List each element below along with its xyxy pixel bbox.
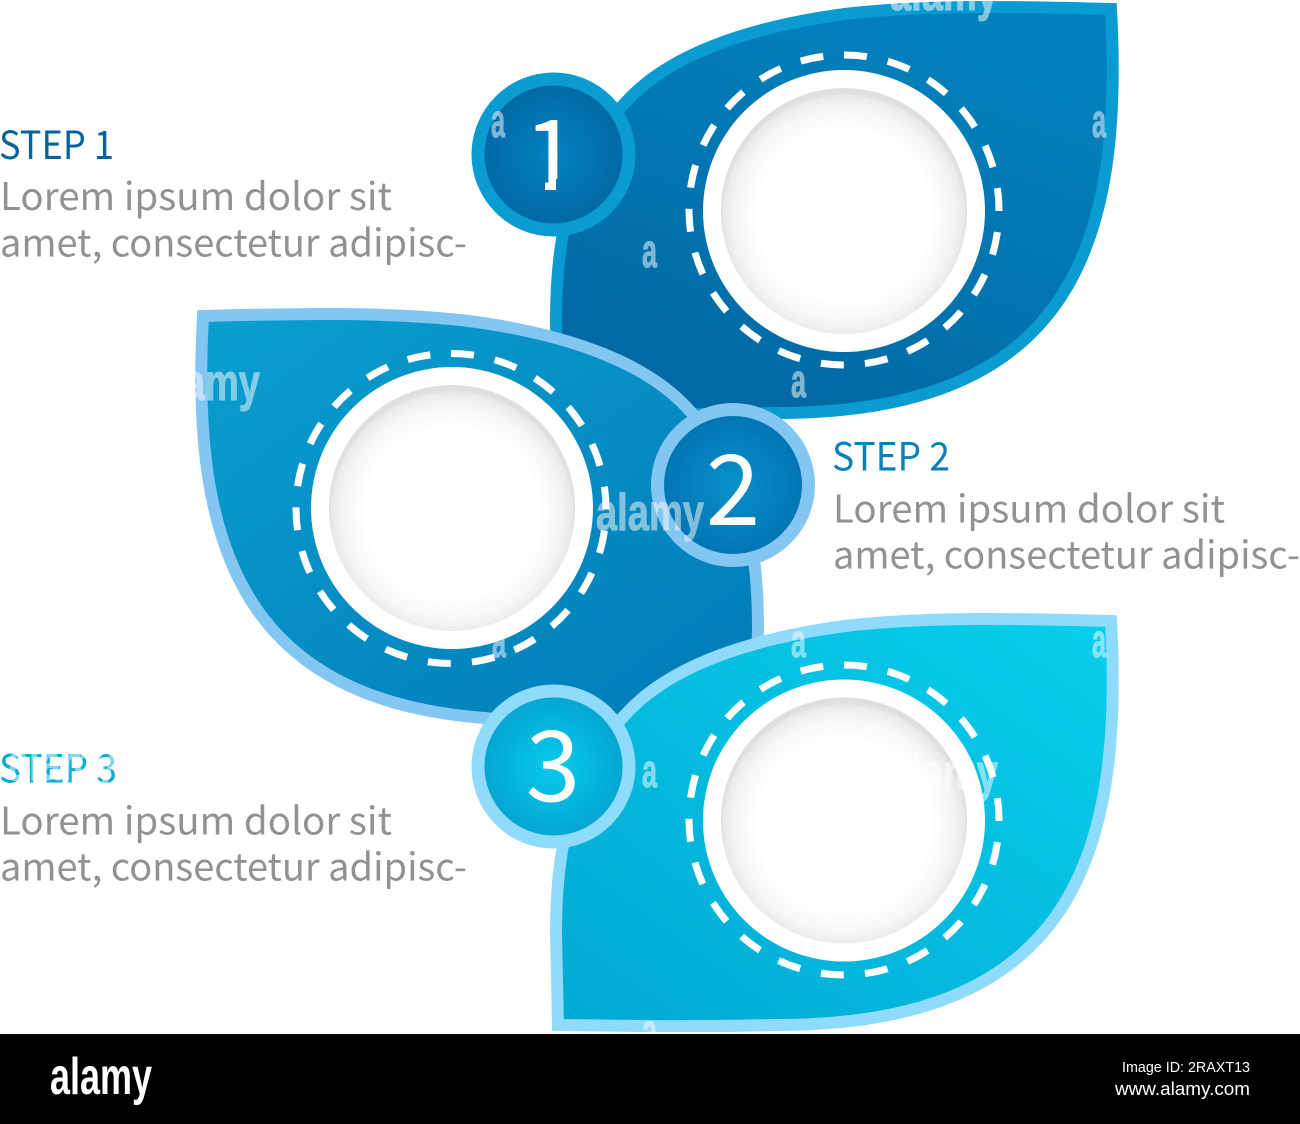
panel: leaf 2 bbox=[201, 314, 758, 721]
panel: leaf 1 bbox=[556, 7, 1113, 414]
dashed ring 2 bbox=[296, 354, 606, 664]
white circle 1 bbox=[703, 70, 985, 352]
watermarks: alamy bbox=[596, 484, 704, 542]
text block: step 1: amet, consectetur adipisc- bbox=[0, 212, 467, 268]
text block: step 1 bbox=[0, 115, 467, 268]
text block: step 3: STEP 3 bbox=[0, 738, 117, 794]
text block: step 3 bbox=[0, 738, 467, 892]
watermarks: a bbox=[791, 354, 806, 407]
panel: leaf 3 bbox=[556, 619, 1113, 1026]
watermarks: a bbox=[642, 744, 657, 797]
text block: step 2 bbox=[832, 426, 1300, 580]
watermarks: alamy bbox=[890, 744, 998, 802]
watermarks: alamy bbox=[152, 354, 260, 412]
footer bar bbox=[0, 1034, 1300, 1124]
white circle 2 bbox=[311, 367, 593, 649]
text block: step 2: amet, consectetur adipisc- bbox=[833, 524, 1300, 580]
badge 2: 2 bbox=[706, 412, 760, 554]
watermarks: alamy bbox=[8, 734, 116, 792]
text block: step 3: amet, consectetur adipisc- bbox=[0, 836, 467, 892]
watermarks: a bbox=[1092, 614, 1106, 667]
badge 3 bbox=[478, 688, 629, 842]
badge 2 bbox=[658, 410, 808, 560]
site url: www.alamy.com bbox=[1114, 1079, 1250, 1099]
footer logo: alamy bbox=[50, 1048, 152, 1106]
text block: step 2: STEP 2 bbox=[832, 426, 950, 482]
watermarks: a bbox=[492, 614, 506, 667]
badge 1: 1 bbox=[524, 77, 578, 219]
text block: step 2: Lorem ipsum dolor sit bbox=[833, 478, 1225, 534]
watermarks: a bbox=[791, 614, 806, 667]
badge 1 bbox=[478, 77, 629, 230]
watermarks: a bbox=[642, 224, 657, 277]
watermarks: a bbox=[1092, 94, 1106, 147]
watermarks: a bbox=[642, 1004, 657, 1057]
text block: step 1: Lorem ipsum dolor sit bbox=[0, 166, 392, 221]
white circle 3 bbox=[703, 680, 985, 962]
dashed ring 1 bbox=[689, 55, 999, 365]
image id: Image ID: 2RAXT13 bbox=[1122, 1059, 1250, 1076]
dashed ring 3 bbox=[689, 665, 999, 975]
text block: step 3: Lorem ipsum dolor sit bbox=[0, 790, 392, 846]
watermarks bbox=[8, 0, 1106, 1057]
text block: step 1: STEP 1 bbox=[0, 115, 114, 171]
badge 3: 3 bbox=[526, 688, 580, 830]
watermarks: a bbox=[491, 94, 505, 147]
